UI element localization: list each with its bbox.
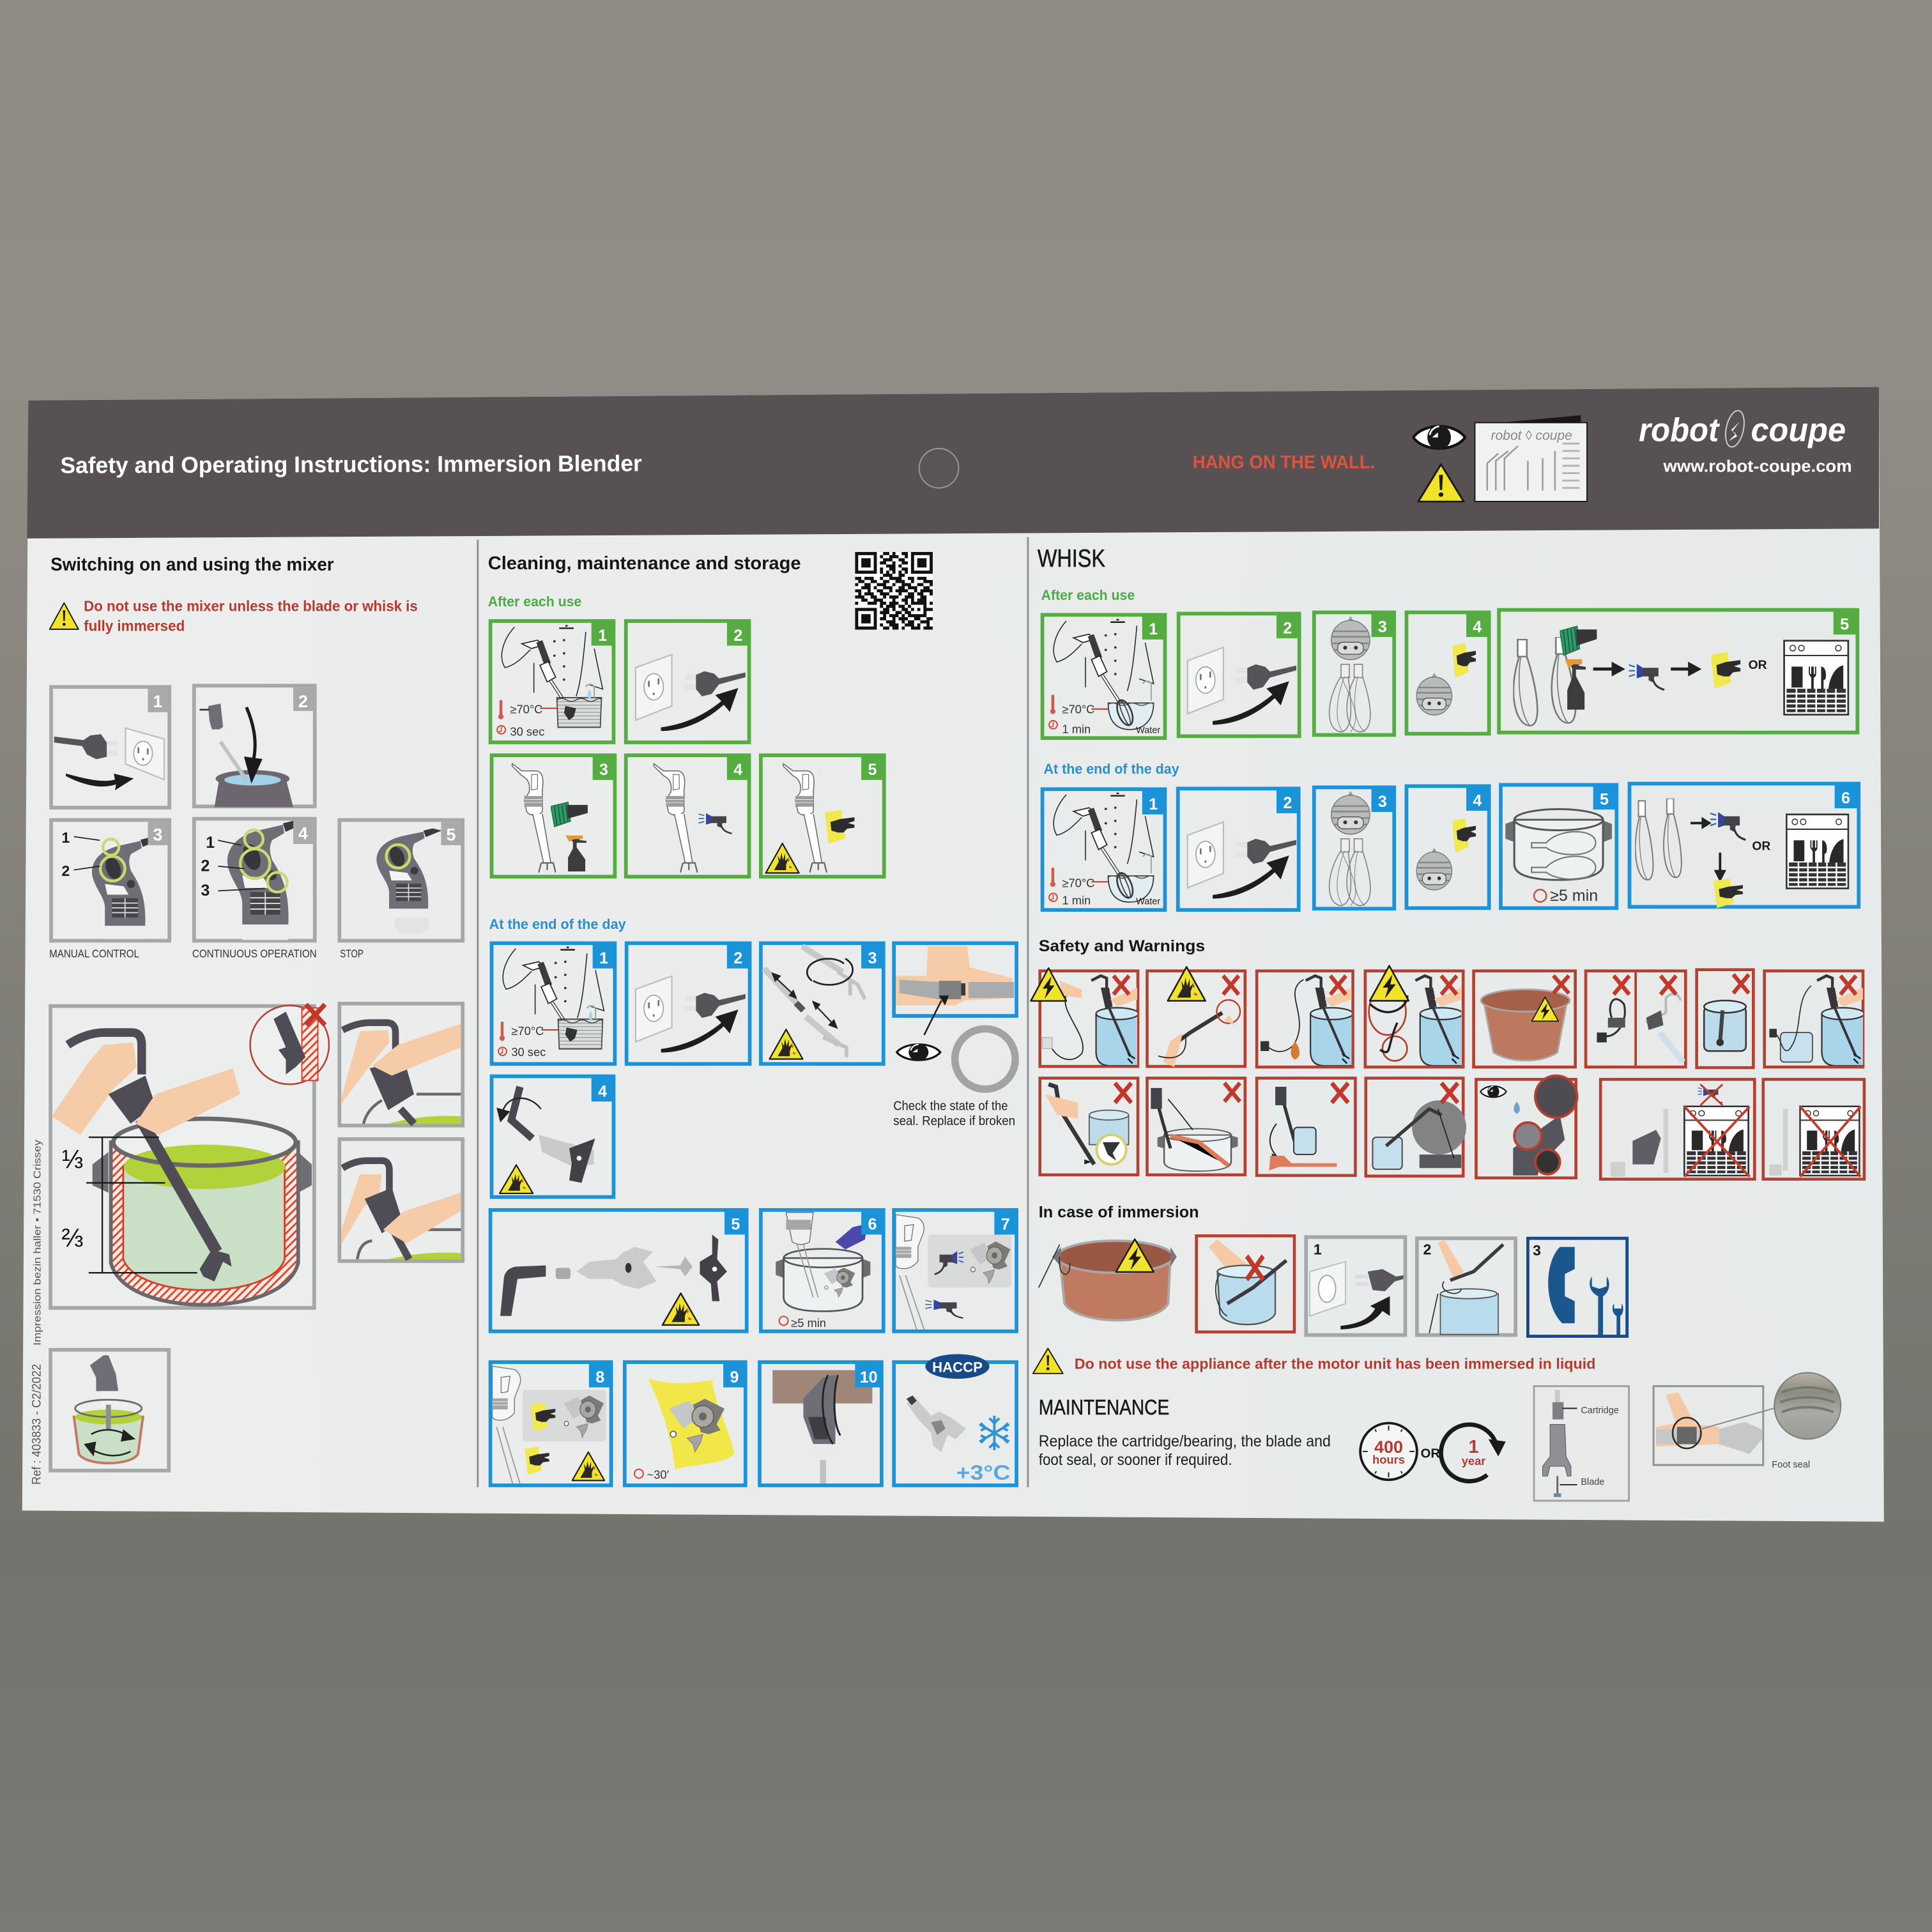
hang on the wall text: HANG ON THE WALL. xyxy=(1193,452,1375,473)
text: replace parts: Replace the cartridge/bearing, the blade and xyxy=(1039,1432,1331,1450)
panel: warning row 1 item 4 xyxy=(1365,966,1463,1067)
panel: whisk blue 3 xyxy=(1314,787,1394,908)
panel: whisk blue 5: 5 xyxy=(1600,790,1609,808)
panel: warning row 1 item 1 xyxy=(1031,968,1138,1066)
panel: whisk green 3 xyxy=(1314,612,1394,735)
HACCP badge: HACCP xyxy=(932,1359,983,1375)
panel: whisk blue 5 xyxy=(1501,785,1616,908)
panel: blue 5 exploded parts xyxy=(491,1210,747,1331)
column divider 2 xyxy=(1027,537,1029,1487)
heading: in case of immersion: In case of immersion xyxy=(1039,1203,1199,1221)
panel: fill level diagram xyxy=(50,1004,329,1308)
panel: warning row 2 item 6 xyxy=(1600,1079,1754,1179)
panel: warning row 2 item 2 xyxy=(1147,1078,1245,1175)
panel: immersion step 1 unplug xyxy=(1306,1237,1406,1335)
panel: fill level diagram: ⅓ xyxy=(61,1144,83,1174)
icon: 1 year cycle: year xyxy=(1462,1454,1485,1468)
icon: instruction booklet: robot ◊ coupe xyxy=(1491,428,1572,443)
panel: whisk blue 1: Water xyxy=(1136,897,1160,907)
panel: green 1 rinse: 30 sec xyxy=(510,724,544,738)
column divider 1 xyxy=(477,540,479,1487)
panel: green 1 rinse: 1 xyxy=(598,627,607,645)
caption: manual control: MANUAL CONTROL xyxy=(49,947,139,960)
panel: whisk green 5: 5 xyxy=(1840,615,1849,633)
panel: whisk green 1: 1 xyxy=(1149,620,1158,638)
panel: manual control step 3 xyxy=(51,820,169,940)
panel: stop step 5: 5 xyxy=(446,825,456,844)
panel: blue 7 rinse parts: 7 xyxy=(1001,1216,1010,1234)
heading: switching on: Switching on and using the mixer xyxy=(50,555,334,575)
subheading: at the end of the day: At the end of the day xyxy=(489,916,626,932)
robot coupe logo xyxy=(1639,409,1846,448)
panel: whisk blue 2: 2 xyxy=(1283,794,1292,812)
icon: instruction booklet xyxy=(1475,415,1587,502)
subheading: whisk end of day: At the end of the day xyxy=(1044,761,1179,777)
heading: safety and warnings: Safety and Warnings xyxy=(1039,937,1205,955)
panel: blue 8 wipe parts: 8 xyxy=(595,1368,604,1386)
warning: do not use after immersion xyxy=(1033,1348,1596,1374)
panel: whisk blue 1: ≥70°C xyxy=(1062,877,1094,890)
highlight circles xyxy=(100,839,125,881)
robot coupe logo: robot xyxy=(1639,411,1721,448)
panel: whisk blue 1 xyxy=(1043,789,1165,910)
panel: green 1 rinse xyxy=(491,621,613,742)
panel: whisk blue 5: ≥5 min xyxy=(1550,887,1598,905)
panel: warning row 1 item 2 xyxy=(1147,967,1245,1067)
panel: manual control step 3: 3 xyxy=(153,825,162,844)
panel: warning row 1 item 3 xyxy=(1257,971,1353,1067)
panel: grip one xyxy=(339,1004,463,1126)
panel: whisk green 5 xyxy=(1499,610,1857,733)
icon: eye on header xyxy=(1413,425,1465,450)
panel: warning row 2 item 5 xyxy=(1476,1076,1577,1178)
panel: manual control step 3: 1 xyxy=(61,829,70,846)
panel: warning row 2 item 3 xyxy=(1257,1078,1355,1176)
icon: 400 hours clock: 400 xyxy=(1374,1438,1403,1457)
panel: continuous operation step 4: 4 xyxy=(298,824,308,843)
panel: immersion step 3 call service xyxy=(1528,1238,1627,1337)
panel: continuous operation step 4: 3 xyxy=(201,882,210,900)
panel: whisk blue 6 xyxy=(1630,784,1859,908)
panel: immerse step 2 xyxy=(194,686,315,807)
panel: seal check xyxy=(894,943,1016,1016)
panel: blue 6 soak xyxy=(761,1210,884,1331)
panel: blue 9 dry: 9 xyxy=(730,1368,739,1386)
robot coupe logo: coupe xyxy=(1751,411,1846,448)
heading: whisk: WHISK xyxy=(1038,545,1105,572)
header band xyxy=(27,387,1879,539)
panel: HACCP cold storage: +3°C xyxy=(956,1460,1010,1484)
panel: blue 7 rinse parts xyxy=(894,1210,1016,1331)
panel: whisk blue 4 xyxy=(1406,786,1489,908)
heading: maintenance: MAINTENANCE xyxy=(1039,1395,1169,1420)
panel: whisk blue 1: 1 min xyxy=(1062,894,1091,907)
panel: blue 9 dry xyxy=(625,1362,746,1485)
panel: blue 1 rinse xyxy=(492,943,615,1064)
panel: whisk green 1: Water xyxy=(1136,725,1160,735)
icon: snowflake xyxy=(979,1416,1009,1450)
panel: whisk blue 1: 1 xyxy=(1149,795,1158,813)
panel: warning row 1 item 8 xyxy=(1765,971,1864,1067)
panel: HACCP cold storage xyxy=(894,1354,1016,1485)
panel: do not reach in xyxy=(1197,1236,1294,1332)
side print text: reference: Ref : 403833 - C2/2022 xyxy=(31,1364,44,1485)
subheading: whisk after each use: After each use xyxy=(1041,587,1135,603)
panel: green 3 brush xyxy=(492,755,615,877)
icon: eye and arrow to seal xyxy=(897,995,949,1061)
panel: green 4 rinse: 4 xyxy=(733,761,742,779)
panel: blue 9 dry: ~30′ xyxy=(647,1468,670,1481)
panel: warning row 1 item 5 xyxy=(1474,971,1575,1067)
panel: immersion step 3 call service: 3 xyxy=(1533,1242,1541,1259)
website: www.robot-coupe.com xyxy=(1663,457,1852,476)
panel: blue 4 remove blade: 4 xyxy=(598,1082,607,1100)
panel: green 1 rinse: ≥70°C xyxy=(510,703,542,716)
text: check the seal: Check the state of the xyxy=(893,1100,1008,1114)
icon: seal ring xyxy=(955,1029,1015,1089)
text: replace parts xyxy=(1039,1432,1331,1469)
panel: whisk green 3: 3 xyxy=(1378,618,1387,636)
panel: grip two xyxy=(339,1139,463,1261)
panel: blue 1 rinse: ≥70°C xyxy=(511,1024,544,1038)
panel: blue 3 dismantle xyxy=(761,943,884,1064)
panel: green 2 unplug xyxy=(626,621,749,742)
panel: whisk green 2 xyxy=(1179,613,1300,736)
panel: green 5 dry xyxy=(761,755,884,877)
panel: whisk green 1 xyxy=(1043,615,1165,738)
panel: whisk green 4 xyxy=(1406,612,1489,733)
inset: blade touching bottom xyxy=(250,1004,329,1084)
panel: plug in step 1: 1 xyxy=(153,692,162,711)
panel: blue 10 storage xyxy=(760,1362,882,1485)
caption: stop: STOP xyxy=(340,947,364,960)
illustration: pot with mixer immersed xyxy=(1039,1239,1177,1320)
panel: blue 4 remove blade xyxy=(492,1077,613,1197)
caption: continuous operation: CONTINUOUS OPERATION xyxy=(192,947,317,960)
panel: whisk green 5: OR xyxy=(1749,659,1767,672)
warning: do not use after immersion: Do not use the appliance after the motor unit has been immersed in liquid xyxy=(1075,1356,1595,1372)
panel: blue 3 dismantle: 3 xyxy=(868,949,877,967)
panel: whisk blue 2 xyxy=(1178,788,1299,910)
panel: whisk blue 6: OR xyxy=(1752,840,1770,854)
panel: foot seal photo xyxy=(1653,1372,1841,1470)
panel: plug in step 1 xyxy=(51,687,169,808)
panel: whisk blue 6: 6 xyxy=(1841,789,1850,807)
text: replace parts: foot seal, or sooner if required. xyxy=(1039,1451,1232,1469)
text: or: OR xyxy=(1421,1446,1440,1460)
panel: immerse step 2: 2 xyxy=(298,692,308,711)
panel: immersion step 1 unplug: 1 xyxy=(1314,1241,1322,1257)
text: check the seal: seal. Replace if broken xyxy=(893,1114,1015,1128)
panel: whisk blue 3: 3 xyxy=(1378,793,1387,811)
icon: warning triangle on header xyxy=(1418,464,1464,502)
panel: green 5 dry: 5 xyxy=(868,761,877,779)
QR code xyxy=(855,552,933,630)
panel: blue 5 exploded parts: 5 xyxy=(731,1216,740,1234)
panel: continuous operation step 4: 1 xyxy=(206,834,215,852)
panel: warning row 2 item 7 xyxy=(1763,1079,1864,1179)
paper card xyxy=(22,387,1884,1522)
panel: green 4 rinse xyxy=(626,755,749,877)
panel: blue 6 soak: 6 xyxy=(868,1216,877,1234)
panel: blue 2 unplug: 2 xyxy=(733,949,742,967)
icon: 400 hours clock: hours xyxy=(1372,1453,1405,1466)
panel: whisk green 2: 2 xyxy=(1283,619,1292,637)
blender in hands xyxy=(52,1032,240,1282)
panel: warning row 1 item 6 xyxy=(1586,971,1685,1067)
panel: whisk blue 4: 4 xyxy=(1473,792,1482,809)
panel: stop step 5 xyxy=(339,820,463,940)
panel: warning row 1 item 7 xyxy=(1697,970,1753,1068)
heading: cleaning: Cleaning, maintenance and storage xyxy=(488,553,801,574)
panel: immersion step 2 lift xyxy=(1417,1238,1515,1335)
icon: 1 year cycle: 1 xyxy=(1469,1437,1479,1457)
panel: green 2 unplug: 2 xyxy=(733,627,742,645)
main title: Safety and Operating Instructions: Immersion Blender xyxy=(60,450,642,479)
panel: fill level diagram: ⅔ xyxy=(61,1223,83,1253)
panel: warning row 2 item 4 xyxy=(1366,1078,1466,1176)
highlight circle xyxy=(387,845,410,868)
fraction lines xyxy=(86,1137,197,1273)
panel: blue 1 rinse: 30 sec xyxy=(511,1045,546,1059)
panel: blue 10 storage: 10 xyxy=(860,1368,878,1386)
panel: whisk green 1: ≥70°C xyxy=(1062,703,1094,716)
panel: blue 2 unplug xyxy=(627,943,750,1064)
pot with liquid xyxy=(93,1119,312,1305)
warning: immersion notice: Do not use the mixer unless the blade or whisk is xyxy=(84,598,418,615)
hang hole xyxy=(919,448,958,488)
panel: cartridge and blade parts: Cartridge xyxy=(1581,1406,1619,1416)
side print text: impression: Impression bezin haller • 71530 Crissey xyxy=(33,1140,43,1346)
HACCP badge xyxy=(925,1354,990,1379)
panel: blue 1 rinse: 1 xyxy=(599,949,608,967)
panel: cartridge and blade parts: Blade xyxy=(1581,1477,1604,1487)
panel: green 3 brush: 3 xyxy=(599,761,608,779)
warning: immersion notice: fully immersed xyxy=(84,617,185,634)
panel: warning row 2 item 1 xyxy=(1040,1078,1138,1175)
panel: whisk green 1: 1 min xyxy=(1062,722,1091,735)
panel: foot seal photo: Foot seal xyxy=(1772,1460,1810,1470)
icon: 1 year cycle xyxy=(1441,1425,1506,1481)
panel: immersion step 2 lift: 2 xyxy=(1423,1241,1431,1257)
panel: manual control step 3: 2 xyxy=(61,862,70,879)
panel: cartridge and blade parts xyxy=(1534,1386,1629,1501)
panel: blue 8 wipe parts xyxy=(491,1362,611,1485)
panel: blue 6 soak: ≥5 min xyxy=(791,1316,826,1330)
subheading: after each use: After each use xyxy=(488,594,581,610)
icon: 400 hours clock xyxy=(1360,1423,1417,1480)
panel: continuous operation step 4: 2 xyxy=(201,857,210,875)
highlight circles xyxy=(240,830,287,892)
text: check the seal xyxy=(893,1100,1015,1128)
panel: stir motion xyxy=(50,1350,169,1471)
warning: immersion notice xyxy=(50,598,418,634)
panel: whisk green 4: 4 xyxy=(1473,618,1482,636)
panel: continuous operation step 4 xyxy=(194,819,315,940)
